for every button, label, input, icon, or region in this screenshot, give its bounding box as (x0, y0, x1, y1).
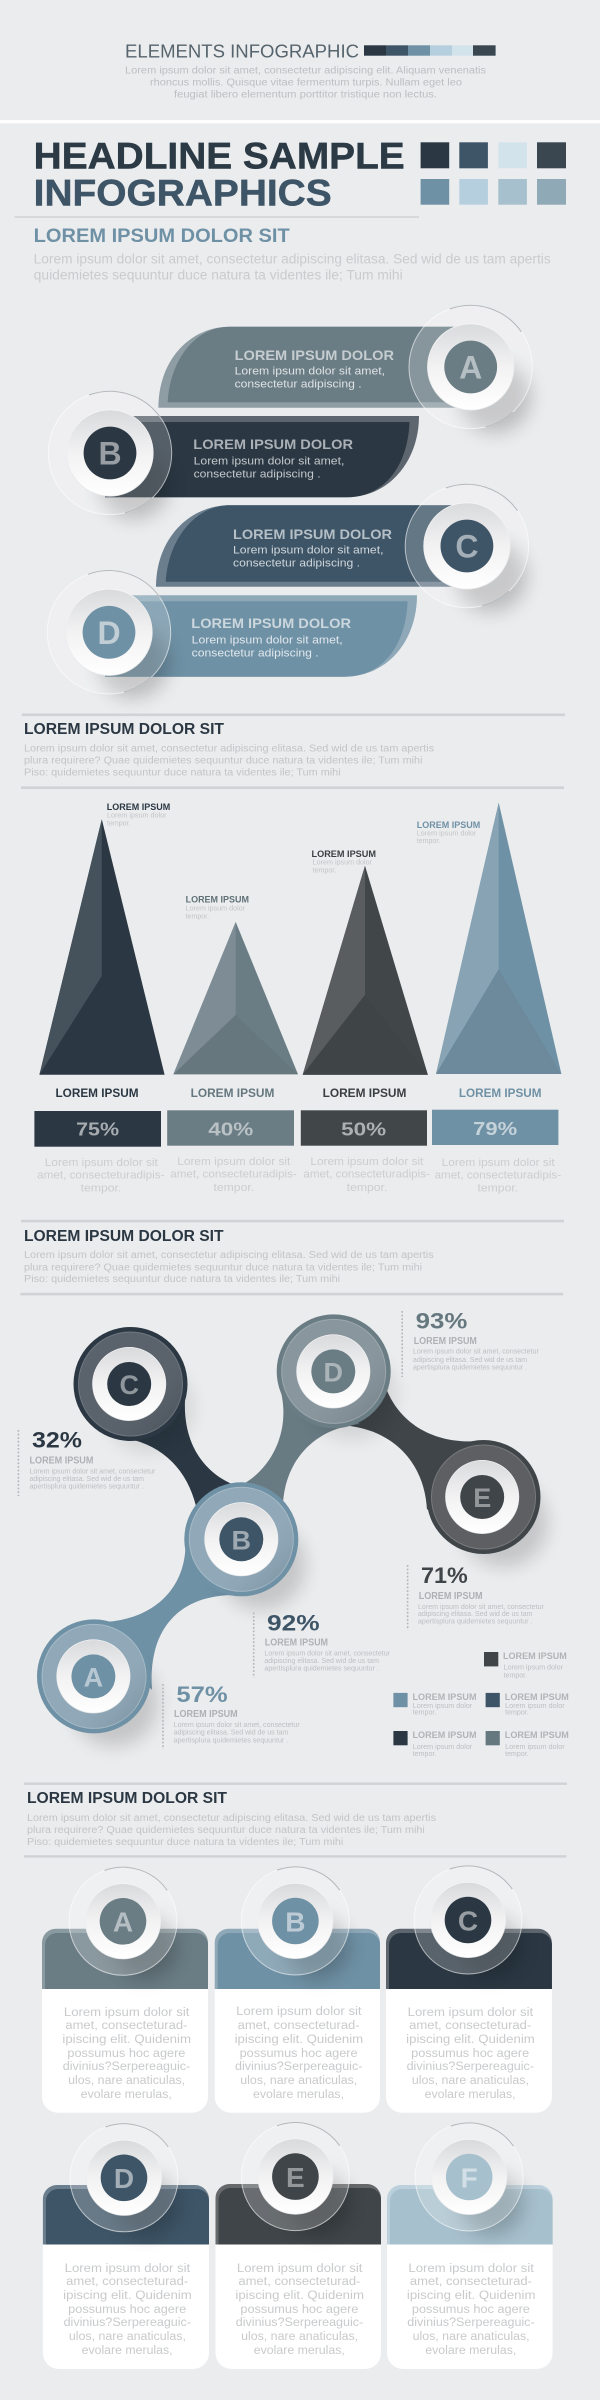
panel: card B (215, 1867, 380, 2113)
icon: card medallion C: C (458, 1905, 478, 1936)
section text (24, 744, 434, 779)
pyramid label 1: LOREM IPSUM (107, 802, 170, 812)
colour swatches (421, 142, 566, 205)
stat column 1: Lorem ipsum dolor sit (45, 1157, 158, 1169)
banner A text: Lorem ipsum dolor sit amet, (235, 366, 385, 378)
pyramid label 1: tempor. (107, 820, 131, 827)
callout 93%: Lorem ipsum dolor sit amet, consectetur (413, 1349, 539, 1356)
card F text: ipiscing elit. Quidenim (407, 2290, 536, 2302)
card C text: Lorem ipsum dolor sit (408, 2007, 534, 2019)
node A (37, 1619, 158, 1746)
callout 32%: 32% (32, 1428, 82, 1452)
connector B to A (90, 1535, 235, 1690)
legend item dark grey: Lorem ipsum dolor (504, 1665, 564, 1672)
colour strip (364, 45, 496, 56)
card B text: Lorem ipsum dolor sit (236, 2006, 363, 2018)
icon: card medallion F (415, 2123, 523, 2235)
pyramid 1 (39, 819, 165, 1075)
card E text: divinius?Serpereaguic- (236, 2317, 363, 2329)
card B text: possumus hoc agere (240, 2048, 358, 2060)
icon: medallion A: A (459, 350, 482, 386)
headline (34, 136, 405, 214)
pyramid label 2 (186, 895, 249, 921)
callout 71%: LOREM IPSUM (419, 1591, 483, 1602)
panel: banner A (158, 305, 532, 433)
legend item dark grey (484, 1651, 567, 1680)
legend item navy: LOREM IPSUM (505, 1692, 569, 1703)
panel: banner D (47, 571, 417, 698)
pyramid 2 (173, 922, 298, 1074)
callout 71%: adipiscing elitasa. Sed wid de us tam (418, 1611, 533, 1618)
card A text: ulos, nare anaticulas, (68, 2075, 185, 2087)
stat column 4: Lorem ipsum dolor sit (442, 1157, 555, 1169)
section heading: network (20, 1220, 564, 1295)
card B text: evolare merulas, (253, 2089, 344, 2101)
card F text: evolare merulas, (425, 2345, 516, 2357)
pyramid label 3: tempor. (313, 868, 336, 875)
legend item navy: tempor. (505, 1710, 529, 1717)
icon: card medallion A (69, 1867, 177, 1979)
connector D to B (245, 1385, 360, 1505)
headline text: Lorem ipsum dolor sit amet, consectetur adipiscing elitasa. Sed wid de us tam apertis (34, 251, 551, 266)
card F text: possumus hoc agere (412, 2304, 530, 2316)
callout 71%: Lorem ipsum dolor sit amet, consectetur (418, 1604, 544, 1611)
panel: banner C (156, 484, 529, 612)
banner B text: LOREM IPSUM DOLOR (193, 436, 353, 452)
stat column 1: 75% (76, 1120, 119, 1140)
card B text: ulos, nare anaticulas, (240, 2075, 357, 2087)
stat column 4: 79% (473, 1119, 517, 1139)
card E text: possumus hoc agere (240, 2304, 358, 2316)
pyramid 4 (436, 803, 561, 1074)
callout 71% (408, 1563, 544, 1630)
section text (24, 1250, 434, 1285)
heading: LOREM IPSUM DOLOR SIT (24, 1228, 224, 1245)
card D text: divinius?Serpereaguic- (64, 2317, 191, 2329)
node A: A (84, 1662, 103, 1692)
card E text: Lorem ipsum dolor sit (237, 2263, 363, 2275)
stat column 1: LOREM IPSUM (56, 1086, 138, 1100)
callout 57%: apertisplura quidemietes sequuntur . (174, 1738, 288, 1744)
stat column 2: LOREM IPSUM (191, 1086, 274, 1100)
callout 32%: apertisplura quidemietes sequuntur . (30, 1484, 144, 1491)
banner C text (233, 526, 392, 570)
banner A text: consectetur adipiscing . (235, 379, 362, 391)
top header (125, 41, 496, 101)
section text: Lorem ipsum dolor sit amet, consectetur adipiscing elitasa. Sed wid de us tam apertis (24, 1250, 434, 1261)
card D text: amet, consecteturad- (66, 2276, 188, 2288)
card A text (62, 2007, 191, 2101)
icon: card medallion E: E (286, 2162, 305, 2193)
callout 92%: apertisplura quidemietes sequuntur . (264, 1666, 379, 1673)
banner B text (193, 436, 353, 481)
banner D text: LOREM IPSUM DOLOR (191, 615, 351, 631)
heading: LOREM IPSUM DOLOR SIT (27, 1790, 228, 1807)
callout 93%: 93% (416, 1309, 467, 1334)
card D text: possumus hoc agere (68, 2304, 186, 2316)
legend item blue: Lorem ipsum dolor (413, 1703, 473, 1710)
panel: card D (43, 2124, 209, 2369)
stat column 4: tempor. (478, 1183, 518, 1195)
banner C text: consectetur adipiscing . (233, 558, 360, 570)
stat column 2: tempor. (214, 1182, 254, 1194)
stat column 2: amet, consecteturadipis- (170, 1169, 297, 1181)
pyramid label 2: Lorem ipsum dolor (186, 906, 246, 913)
stat column 2: Lorem ipsum dolor sit (177, 1156, 290, 1168)
card C text (406, 2007, 535, 2101)
banner C text: Lorem ipsum dolor sit amet, (233, 545, 384, 557)
panel: card F (387, 2123, 553, 2369)
legend item blue (393, 1692, 477, 1717)
icon: medallion B: B (98, 436, 122, 472)
icon: medallion C: C (455, 528, 478, 564)
section text: Piso: quidemietes sequuntur duce natura ta videntes ile; Tum mihi (24, 1274, 340, 1285)
legend item slate: tempor. (505, 1751, 529, 1758)
icon: card medallion C (414, 1866, 522, 1978)
panel: card C (386, 1866, 552, 2113)
icon: medallion B (48, 391, 172, 519)
callout 32% (18, 1428, 156, 1496)
callout 92%: adipiscing elitasa. Sed wid de us tam (264, 1658, 379, 1665)
card A text: possumus hoc agere (67, 2048, 185, 2060)
callout 93%: LOREM IPSUM (414, 1336, 477, 1347)
intro text: rhoncus mollis. Quisque vitae fermentum turpis. Nullam eget leo (150, 78, 462, 89)
stat column 3: tempor. (347, 1182, 387, 1194)
intro text: feugiat libero elementum porttitor tristique non lectus. (174, 90, 437, 101)
banner A text: LOREM IPSUM DOLOR (235, 347, 394, 363)
card E text: amet, consecteturad- (238, 2276, 361, 2288)
callout 92% (254, 1610, 391, 1678)
pyramid label 3: Lorem ipsum dolor (313, 860, 373, 867)
card E text (235, 2263, 364, 2357)
node B: B (232, 1525, 251, 1555)
icon: card medallion D: D (114, 2163, 134, 2194)
icon: card medallion F: F (461, 2162, 478, 2193)
stat column 1: amet, consecteturadipis- (37, 1170, 165, 1182)
banner B text: consectetur adipiscing . (194, 469, 321, 481)
callout 57%: LOREM IPSUM (174, 1709, 238, 1720)
legend item blue: tempor. (413, 1710, 436, 1717)
pyramid label 4: Lorem ipsum dolor (417, 830, 477, 837)
icon: card medallion B: B (285, 1906, 306, 1937)
stat column 3: amet, consecteturadipis- (303, 1169, 430, 1181)
card A text: Lorem ipsum dolor sit (64, 2007, 190, 2019)
callout 57%: Lorem ipsum dolor sit amet, consectetur (174, 1722, 300, 1729)
pyramid label 2: LOREM IPSUM (186, 895, 249, 905)
callout 92%: Lorem ipsum dolor sit amet, consectetur (264, 1651, 391, 1658)
section text: Piso: quidemietes sequuntur duce natura ta videntes ile; Tum mihi (24, 768, 341, 779)
stat column 1 (34, 1086, 165, 1195)
section heading: pyramids (21, 714, 565, 789)
small title: ELEMENTS INFOGRAPHIC (125, 41, 359, 61)
node C (74, 1327, 192, 1452)
panel: banner B (48, 391, 419, 519)
legend item dark: tempor. (413, 1751, 436, 1758)
node B (184, 1482, 305, 1609)
card F text (407, 2263, 536, 2357)
card D text: evolare merulas, (82, 2345, 173, 2357)
card D text: ulos, nare anaticulas, (69, 2331, 186, 2343)
callout 92%: LOREM IPSUM (265, 1638, 328, 1649)
legend item slate (486, 1730, 569, 1758)
card C text: ipiscing elit. Quidenim (406, 2034, 535, 2046)
legend item slate: Lorem ipsum dolor (505, 1744, 565, 1751)
icon: card medallion E (241, 2123, 349, 2235)
banner D text (191, 615, 351, 660)
callout 57% (163, 1682, 300, 1749)
callout 57%: 57% (176, 1682, 228, 1707)
headline text (34, 251, 551, 282)
legend item slate: LOREM IPSUM (505, 1730, 569, 1741)
node E (426, 1440, 548, 1567)
section text: plura requirere? Quae quidemietes sequuntur duce natura ta videntes ile; Tum mihi (27, 1825, 425, 1836)
panel: card A (42, 1867, 208, 2113)
icon: medallion C (405, 484, 529, 612)
pyramid label 1 (107, 802, 170, 827)
section heading: cards (24, 1782, 567, 1858)
card A text: evolare merulas, (81, 2089, 172, 2101)
section text: Lorem ipsum dolor sit amet, consectetur adipiscing elitasa. Sed wid de us tam apertis (27, 1813, 436, 1824)
section text: Lorem ipsum dolor sit amet, consectetur adipiscing elitasa. Sed wid de us tam apertis (24, 744, 434, 755)
legend item dark grey: tempor. (504, 1672, 527, 1680)
legend item dark: Lorem ipsum dolor (413, 1744, 473, 1751)
stat column 2 (167, 1086, 297, 1194)
banner D text: consectetur adipiscing . (192, 648, 319, 660)
card B text: amet, consecteturad- (238, 2020, 360, 2032)
callout 32%: adipiscing elitasa. Sed wid de us tam (30, 1476, 144, 1483)
legend item navy (486, 1692, 569, 1717)
pyramid label 3 (312, 849, 376, 875)
node D (277, 1314, 396, 1439)
legend item navy: Lorem ipsum dolor (505, 1703, 565, 1710)
card F text: Lorem ipsum dolor sit (408, 2263, 535, 2275)
stat column 4: amet, consecteturadipis- (435, 1170, 561, 1182)
card B text (235, 2006, 363, 2101)
stat column 4: LOREM IPSUM (459, 1086, 542, 1100)
card E text: ipiscing elit. Quidenim (235, 2290, 364, 2302)
card A text: amet, consecteturad- (65, 2020, 188, 2032)
card D text (63, 2263, 192, 2357)
card D text: Lorem ipsum dolor sit (65, 2263, 191, 2275)
intro text (125, 65, 486, 101)
callout 71%: apertisplura quidemietes sequuntur . (418, 1619, 533, 1626)
callout 32%: Lorem ipsum dolor sit amet, consectetur (30, 1469, 156, 1476)
stat column 3: 50% (341, 1120, 386, 1140)
section text (27, 1813, 436, 1848)
node C: C (119, 1370, 139, 1400)
banner D text: Lorem ipsum dolor sit amet, (192, 635, 343, 647)
chart: pyramids (34, 802, 561, 1195)
callout 93% (402, 1309, 539, 1377)
pyramid label 2: tempor. (186, 914, 209, 921)
legend item dark (393, 1730, 477, 1758)
headline: HEADLINE SAMPLE (34, 136, 405, 177)
pyramid label 3: LOREM IPSUM (312, 849, 376, 859)
stat column 1: tempor. (81, 1183, 121, 1195)
connector D to E (340, 1388, 480, 1510)
card F text: divinius?Serpereaguic- (407, 2317, 535, 2329)
pyramid 3 (303, 866, 428, 1075)
stat column 4 (432, 1086, 561, 1195)
callout 93%: apertisplura quidemietes sequuntur . (413, 1365, 527, 1372)
panel: card E (216, 2123, 381, 2369)
headline: INFOGRAPHICS (34, 173, 332, 214)
card E text: ulos, nare anaticulas, (241, 2331, 358, 2343)
card B text: ipiscing elit. Quidenim (235, 2034, 363, 2046)
icon: medallion A (409, 305, 532, 433)
legend item dark grey: LOREM IPSUM (503, 1651, 567, 1662)
pyramid label 4 (417, 820, 480, 845)
pyramid label 4: tempor. (417, 838, 440, 845)
section text: plura requirere? Quae quidemietes sequuntur duce natura ta videntes ile; Tum mihi (24, 1262, 422, 1273)
section text: Piso: quidemietes sequuntur duce natura ta videntes ile; Tum mihi (27, 1837, 343, 1848)
card E text: evolare merulas, (254, 2345, 345, 2357)
callout 93%: adipiscing elitasa. Sed wid de us tam (413, 1357, 527, 1364)
card B text: divinius?Serpereaguic- (235, 2061, 363, 2073)
icon: card medallion D (70, 2124, 178, 2236)
stat column 3 (301, 1086, 430, 1194)
callout 57%: adipiscing elitasa. Sed wid de us tam (174, 1730, 288, 1737)
card C text: amet, consecteturad- (409, 2020, 531, 2032)
callout 32%: LOREM IPSUM (30, 1456, 93, 1467)
subheading: LOREM IPSUM DOLOR SIT (34, 226, 290, 247)
icon: medallion D (47, 571, 171, 698)
stat column 3: Lorem ipsum dolor sit (310, 1156, 423, 1168)
banner C text: LOREM IPSUM DOLOR (233, 526, 392, 542)
node D: D (324, 1357, 343, 1387)
card A text: ipiscing elit. Quidenim (62, 2034, 191, 2046)
icon: card medallion B (241, 1867, 349, 1979)
banner A text (235, 347, 394, 391)
card D text: ipiscing elit. Quidenim (63, 2290, 192, 2302)
heading: LOREM IPSUM DOLOR SIT (24, 721, 225, 738)
card C text: evolare merulas, (425, 2089, 516, 2101)
legend item blue: LOREM IPSUM (412, 1692, 477, 1703)
intro text: Lorem ipsum dolor sit amet, consectetur adipiscing elit. Aliquam venenatis (125, 65, 486, 76)
stat column 3: LOREM IPSUM (323, 1086, 406, 1100)
legend (393, 1651, 569, 1758)
pyramid label 1: Lorem ipsum dolor (107, 812, 167, 819)
banner B text: Lorem ipsum dolor sit amet, (194, 456, 344, 468)
card C text: divinius?Serpereaguic- (407, 2061, 534, 2073)
pyramid label 4: LOREM IPSUM (417, 820, 480, 830)
legend item dark: LOREM IPSUM (412, 1730, 477, 1741)
stat column 2: 40% (208, 1120, 253, 1140)
diagram: connected nodes (18, 1309, 569, 1758)
card C text: possumus hoc agere (411, 2048, 529, 2060)
headline block (14, 136, 566, 282)
connector C to B (125, 1400, 232, 1506)
section text: plura requirere? Quae quidemietes sequuntur duce natura ta videntes ile; Tum mihi (24, 756, 422, 767)
card F text: amet, consecteturad- (410, 2276, 532, 2288)
card A text: divinius?Serpereaguic- (63, 2061, 190, 2073)
callout 71%: 71% (421, 1563, 468, 1588)
icon: medallion D: D (97, 615, 121, 651)
callout 92%: 92% (267, 1610, 320, 1635)
card F text: ulos, nare anaticulas, (413, 2331, 530, 2343)
headline text: quidemietes sequuntur duce natura ta videntes ile; Tum mihi (34, 267, 403, 282)
node E: E (473, 1483, 491, 1513)
card C text: ulos, nare anaticulas, (412, 2075, 529, 2087)
icon: card medallion A: A (113, 1907, 133, 1938)
